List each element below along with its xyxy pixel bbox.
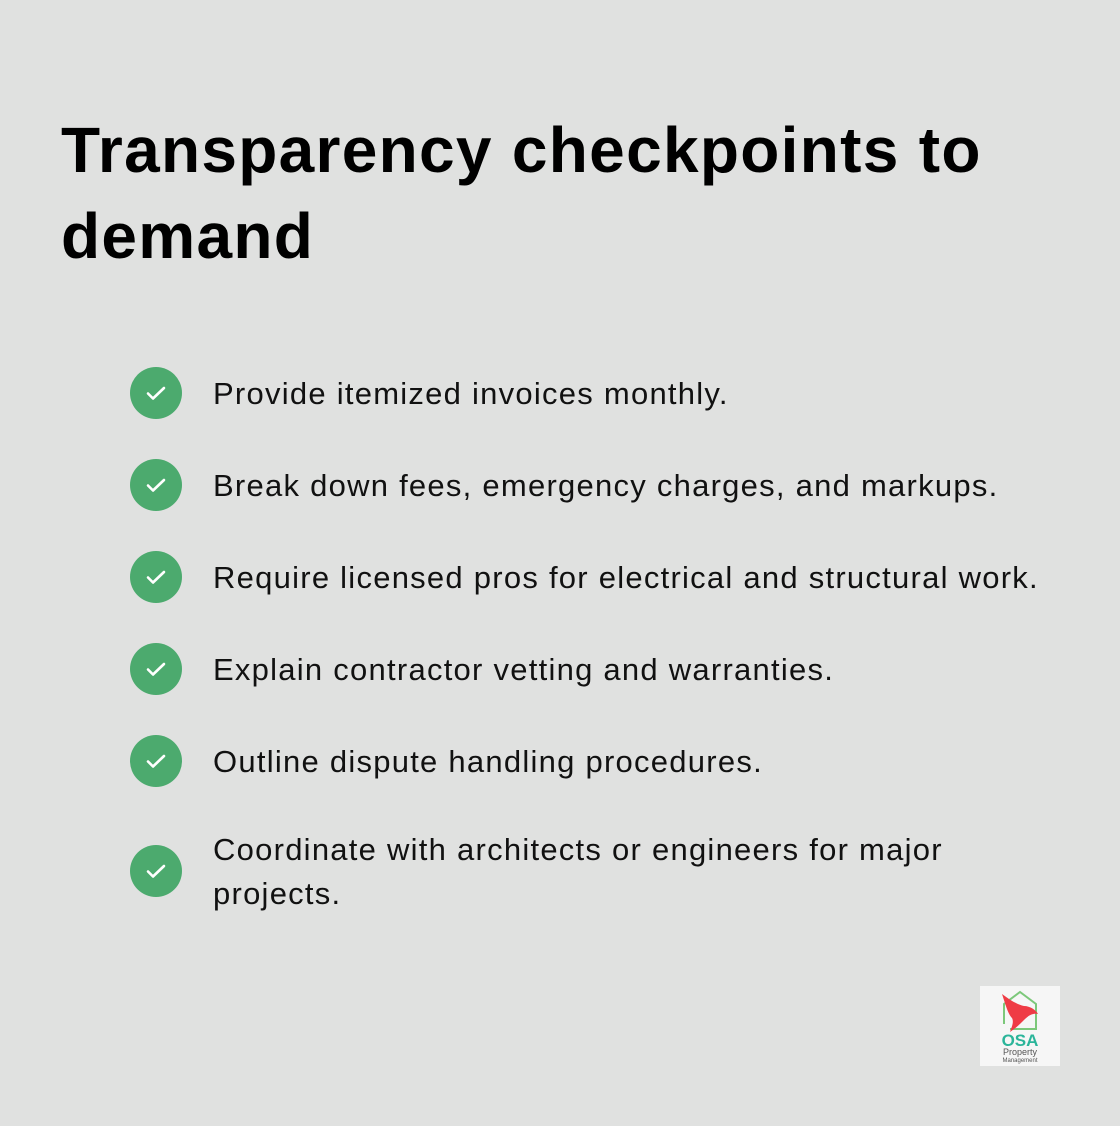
item 1: Provide itemized invoices monthly. (213, 376, 729, 411)
item 2: Break down fees, emergency charges, and markups. (213, 468, 998, 503)
item 6 (130, 832, 943, 911)
title (61, 114, 982, 272)
logo: Management (1002, 1058, 1038, 1064)
title: demand (61, 200, 314, 272)
item 2 (130, 459, 998, 511)
item 4: Explain contractor vetting and warranties. (213, 652, 834, 687)
logo: OSA (1002, 1031, 1038, 1050)
title: Transparency checkpoints to (61, 114, 982, 186)
item 1 (130, 367, 729, 419)
logo (980, 986, 1060, 1066)
item 6: Coordinate with architects or engineers for major (213, 832, 943, 867)
item 5 (130, 735, 763, 787)
item 5: Outline dispute handling procedures. (213, 744, 763, 779)
item 3: Require licensed pros for electrical and structural work. (213, 560, 1039, 595)
logo: Property (1003, 1047, 1038, 1057)
item 3 (130, 551, 1039, 603)
item 6: projects. (213, 876, 341, 911)
item 4 (130, 643, 834, 695)
